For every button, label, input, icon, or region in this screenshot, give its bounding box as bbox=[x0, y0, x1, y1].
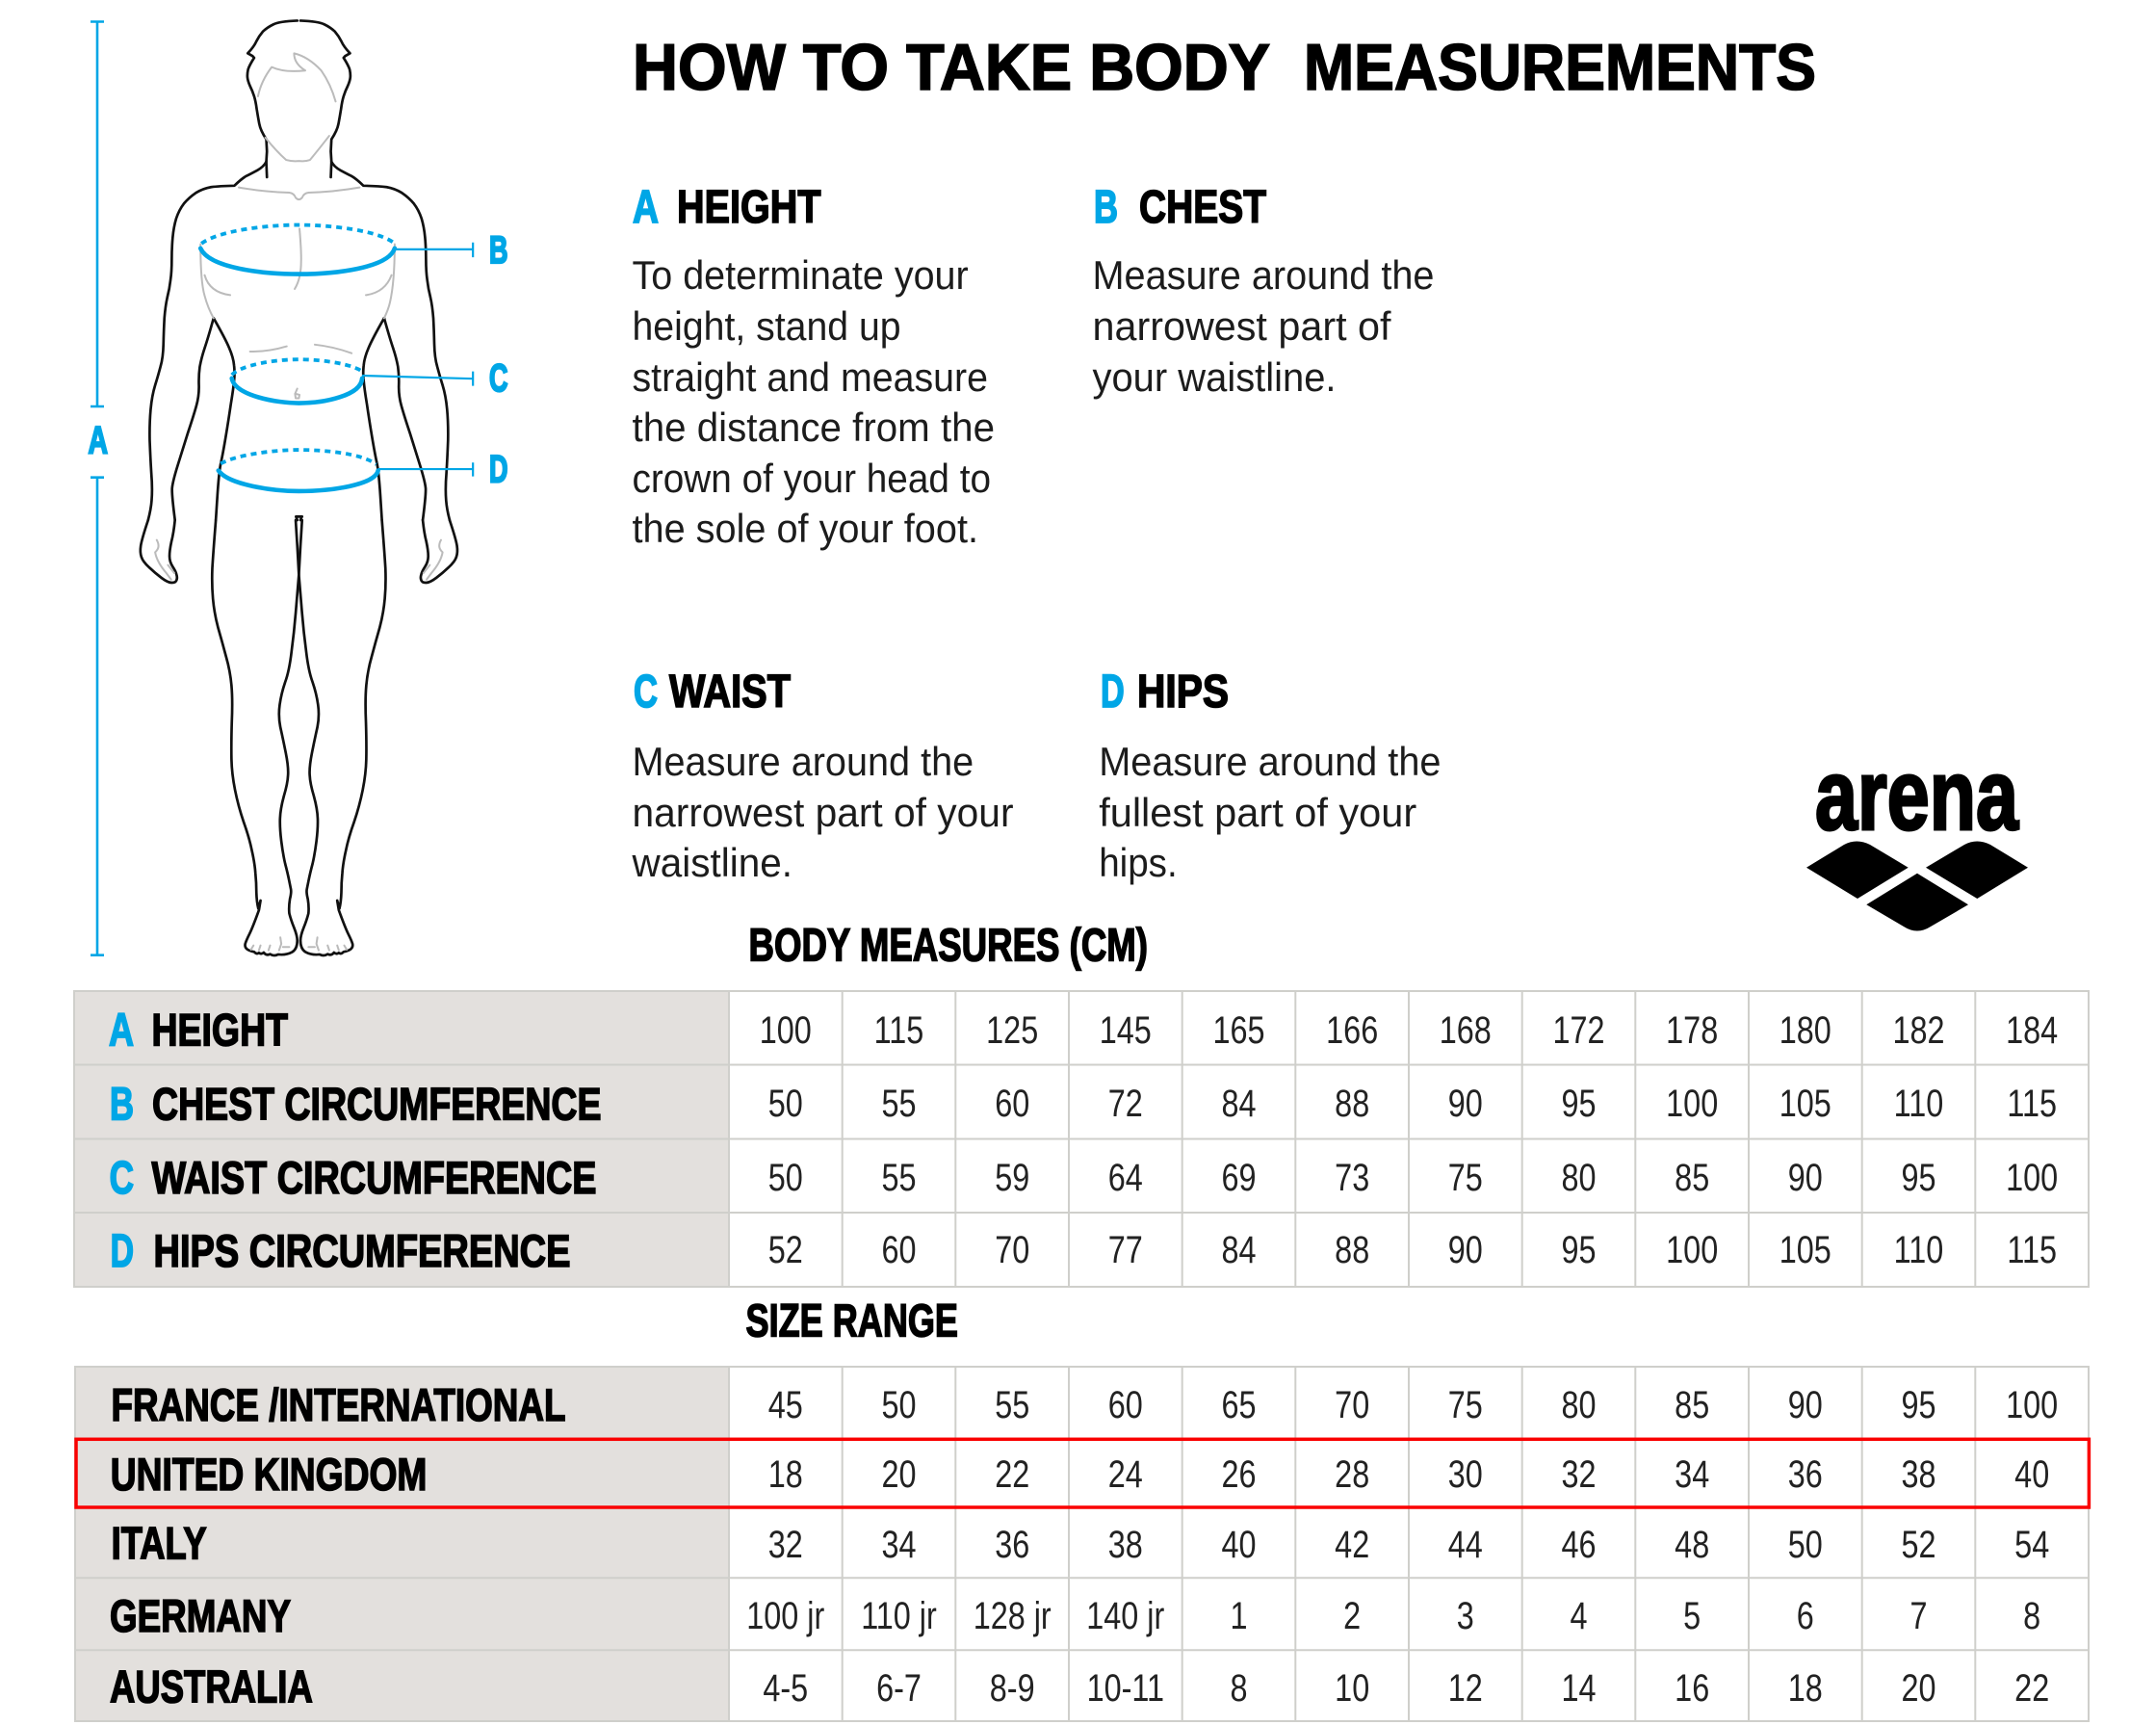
row: chest circumference: 55 bbox=[881, 1082, 917, 1125]
row: france / international: 70 bbox=[1335, 1383, 1369, 1426]
section D: hips bbox=[1099, 666, 1441, 885]
row: height: 168 bbox=[1440, 1008, 1492, 1052]
row: chest circumference: CHEST CIRCUMFERENCE bbox=[152, 1079, 601, 1129]
text A: To determinate your bbox=[632, 252, 969, 298]
heading B bbox=[1094, 182, 1266, 233]
row: height: A bbox=[109, 1006, 134, 1056]
row: united kingdom: 26 bbox=[1221, 1452, 1257, 1496]
row: italy: 46 bbox=[1561, 1523, 1597, 1566]
figure label B: B bbox=[489, 229, 508, 272]
row: waist circumference: WAIST CIRCUMFERENCE bbox=[152, 1152, 597, 1203]
heading A bbox=[633, 182, 820, 233]
text B: narrowest part of bbox=[1092, 303, 1391, 349]
row: united kingdom: 32 bbox=[1561, 1452, 1597, 1496]
row: waist circumference: 100 bbox=[2006, 1156, 2058, 1199]
row: chest circumference: 88 bbox=[1335, 1082, 1369, 1125]
row: hips circumference: 70 bbox=[995, 1228, 1029, 1271]
row: italy: 40 bbox=[1221, 1523, 1257, 1566]
row: hips circumference: 77 bbox=[1108, 1228, 1143, 1271]
row: waist circumference: C bbox=[110, 1153, 134, 1204]
heading D: HIPS bbox=[1137, 666, 1229, 718]
row: height: 100 bbox=[760, 1008, 812, 1052]
row: france / international: 90 bbox=[1788, 1383, 1823, 1426]
text D: Measure around the bbox=[1099, 739, 1441, 784]
row: australia: 22 bbox=[2014, 1666, 2049, 1710]
row: chest circumference: B bbox=[110, 1079, 134, 1131]
row: united kingdom: 40 bbox=[2014, 1452, 2049, 1496]
text C: Measure around the bbox=[632, 739, 974, 784]
row: france / international: 80 bbox=[1561, 1383, 1597, 1426]
text B: your waistline. bbox=[1092, 354, 1337, 400]
row: hips circumference: 90 bbox=[1448, 1228, 1483, 1271]
row: hips circumference: 100 bbox=[1666, 1228, 1718, 1271]
row: australia: 10 bbox=[1335, 1666, 1369, 1710]
arena logo: arena bbox=[1815, 740, 2019, 851]
row: waist circumference: 64 bbox=[1108, 1156, 1143, 1199]
row: waist circumference: 95 bbox=[1901, 1156, 1936, 1199]
heading A: A bbox=[633, 182, 659, 233]
row: germany: 110 jr bbox=[861, 1594, 937, 1637]
row: hips circumference: 115 bbox=[2007, 1228, 2057, 1271]
title: HOW TO TAKE BODY bbox=[633, 31, 1270, 104]
row: australia: 12 bbox=[1448, 1666, 1483, 1710]
row: italy: 54 bbox=[2014, 1523, 2049, 1566]
row: france / international: 50 bbox=[881, 1383, 917, 1426]
ring D: hips bbox=[219, 450, 473, 491]
right hand and leg bbox=[299, 520, 457, 955]
row: united kingdom: 18 bbox=[768, 1452, 803, 1496]
row: france / international: 60 bbox=[1108, 1383, 1143, 1426]
row: chest circumference: 72 bbox=[1108, 1082, 1143, 1125]
row: germany bbox=[110, 1590, 2040, 1641]
section B: chest bbox=[1092, 182, 1435, 400]
row: united kingdom: 34 bbox=[1675, 1452, 1709, 1496]
row: chest circumference: 100 bbox=[1666, 1082, 1718, 1125]
row: hips circumference: HIPS CIRCUMFERENCE bbox=[154, 1225, 570, 1276]
row: germany: 1 bbox=[1230, 1594, 1248, 1637]
row: waist circumference: 59 bbox=[995, 1156, 1029, 1199]
row: chest circumference: 95 bbox=[1561, 1082, 1597, 1125]
row: height: 184 bbox=[2006, 1008, 2058, 1052]
row: germany: 2 bbox=[1343, 1594, 1361, 1637]
row: france / international: 55 bbox=[995, 1383, 1029, 1426]
row: germany: 6 bbox=[1797, 1594, 1814, 1637]
row: height: 182 bbox=[1892, 1008, 1945, 1052]
row: hips circumference: 110 bbox=[1894, 1228, 1943, 1271]
text D: fullest part of your bbox=[1099, 790, 1416, 835]
text A: crown of your head to bbox=[632, 456, 991, 501]
row: australia: 14 bbox=[1561, 1666, 1597, 1710]
ring B: chest bbox=[200, 225, 473, 274]
row: germany: 100 jr bbox=[746, 1594, 824, 1637]
row: united kingdom: 24 bbox=[1108, 1452, 1143, 1496]
title bbox=[633, 31, 1816, 104]
row: australia: 6-7 bbox=[876, 1666, 922, 1710]
row: germany: 5 bbox=[1683, 1594, 1701, 1637]
text B: Measure around the bbox=[1092, 252, 1435, 298]
row: height: 180 bbox=[1779, 1008, 1831, 1052]
row: height: 165 bbox=[1212, 1008, 1265, 1052]
row: chest circumference: 115 bbox=[2007, 1082, 2057, 1125]
row: australia: 8-9 bbox=[990, 1666, 1035, 1710]
heading B: B bbox=[1094, 182, 1118, 233]
text A: straight and measure bbox=[632, 354, 988, 400]
row: hips circumference: D bbox=[111, 1226, 134, 1277]
row: germany: 8 bbox=[2023, 1594, 2040, 1637]
row: germany: 140 jr bbox=[1086, 1594, 1164, 1637]
head and right side outline bbox=[300, 20, 450, 520]
row: hips circumference: 84 bbox=[1221, 1228, 1257, 1271]
row: italy: 34 bbox=[881, 1523, 917, 1566]
arena logo bbox=[1806, 740, 2028, 930]
heading: size range: SIZE RANGE bbox=[745, 1296, 958, 1347]
label column background bbox=[75, 1367, 729, 1721]
text C bbox=[632, 739, 1014, 885]
row: australia: 8 bbox=[1230, 1666, 1248, 1710]
height bar A bbox=[89, 21, 108, 955]
row: australia: 20 bbox=[1901, 1666, 1936, 1710]
text A: the sole of your foot. bbox=[632, 506, 978, 551]
heading: body measures: BODY MEASURES (CM) bbox=[749, 921, 1148, 971]
ring C: waist bbox=[232, 359, 473, 404]
row: france / international: FRANCE /INTERNATIONAL bbox=[112, 1379, 566, 1430]
row: height bbox=[109, 1004, 2058, 1056]
row: height: HEIGHT bbox=[152, 1004, 288, 1056]
row: france / international: 45 bbox=[768, 1383, 803, 1426]
row: united kingdom bbox=[111, 1449, 2049, 1500]
row: italy: 48 bbox=[1675, 1523, 1709, 1566]
row: france / international: 75 bbox=[1448, 1383, 1483, 1426]
row: hips circumference: 105 bbox=[1779, 1228, 1831, 1271]
heading A: HEIGHT bbox=[677, 182, 820, 233]
row: waist circumference: 69 bbox=[1221, 1156, 1257, 1199]
row: france / international: 85 bbox=[1675, 1383, 1709, 1426]
row: italy: 32 bbox=[768, 1523, 803, 1566]
text A: height, stand up bbox=[632, 303, 901, 349]
row: height: 166 bbox=[1326, 1008, 1378, 1052]
text B bbox=[1092, 252, 1435, 400]
row: france / international: 65 bbox=[1221, 1383, 1257, 1426]
row: waist circumference: 73 bbox=[1335, 1156, 1369, 1199]
body figure with measurement rings bbox=[141, 20, 473, 955]
row: height: 178 bbox=[1666, 1008, 1718, 1052]
row: australia: AUSTRALIA bbox=[110, 1661, 313, 1712]
row: hips circumference: 95 bbox=[1561, 1228, 1597, 1271]
table grid bbox=[74, 991, 2089, 1287]
row: hips circumference: 88 bbox=[1335, 1228, 1369, 1271]
left hand and leg bbox=[141, 520, 299, 955]
heading D bbox=[1101, 666, 1229, 718]
row: chest circumference: 90 bbox=[1448, 1082, 1483, 1125]
text A: the distance from the bbox=[632, 405, 995, 450]
row: italy bbox=[112, 1518, 2049, 1569]
row: australia: 18 bbox=[1788, 1666, 1823, 1710]
text D: hips. bbox=[1099, 840, 1178, 885]
row: france / international bbox=[112, 1379, 2058, 1430]
row: germany: 3 bbox=[1457, 1594, 1474, 1637]
row: italy: 44 bbox=[1448, 1523, 1483, 1566]
row: waist circumference: 90 bbox=[1788, 1156, 1823, 1199]
title: MEASUREMENTS bbox=[1304, 31, 1816, 104]
row: chest circumference: 50 bbox=[768, 1082, 803, 1125]
row: australia bbox=[110, 1661, 2049, 1712]
row: australia: 16 bbox=[1675, 1666, 1709, 1710]
row: france / international: 95 bbox=[1901, 1383, 1936, 1426]
row: waist circumference bbox=[110, 1152, 2058, 1204]
row: height: 145 bbox=[1100, 1008, 1152, 1052]
row: height: 172 bbox=[1552, 1008, 1605, 1052]
row: united kingdom: 30 bbox=[1448, 1452, 1483, 1496]
row: italy: 36 bbox=[995, 1523, 1029, 1566]
row: germany: 4 bbox=[1570, 1594, 1588, 1637]
figure lower half bbox=[141, 520, 457, 955]
heading D: D bbox=[1101, 666, 1125, 718]
row: germany: 128 jr bbox=[974, 1594, 1052, 1637]
row: waist circumference: 55 bbox=[881, 1156, 917, 1199]
table: size range bbox=[75, 1367, 2089, 1721]
text D bbox=[1099, 739, 1441, 885]
row: germany: 7 bbox=[1909, 1594, 1928, 1637]
row: italy: ITALY bbox=[112, 1518, 207, 1569]
label column background bbox=[74, 991, 729, 1287]
row: italy: 52 bbox=[1901, 1523, 1936, 1566]
text C: waistline. bbox=[632, 840, 792, 885]
row: united kingdom: 22 bbox=[995, 1452, 1029, 1496]
height bar A: A bbox=[89, 420, 108, 462]
row: hips circumference: 52 bbox=[768, 1228, 803, 1271]
row: italy: 50 bbox=[1788, 1523, 1823, 1566]
row: united kingdom: 28 bbox=[1335, 1452, 1369, 1496]
row: germany: GERMANY bbox=[110, 1590, 291, 1641]
row: italy: 42 bbox=[1335, 1523, 1369, 1566]
row: france / international: 100 bbox=[2006, 1383, 2058, 1426]
table: body measures bbox=[74, 991, 2089, 1287]
text A bbox=[632, 252, 995, 551]
row: chest circumference: 60 bbox=[995, 1082, 1029, 1125]
row: chest circumference: 105 bbox=[1779, 1082, 1831, 1125]
heading C: C bbox=[634, 666, 658, 718]
row: united kingdom: 38 bbox=[1901, 1452, 1936, 1496]
row: waist circumference: 75 bbox=[1448, 1156, 1483, 1199]
row: hips circumference: 60 bbox=[881, 1228, 917, 1271]
row: waist circumference: 85 bbox=[1675, 1156, 1709, 1199]
row: waist circumference: 80 bbox=[1561, 1156, 1597, 1199]
face, chest and abdomen detail lines bbox=[200, 53, 395, 399]
section A: height bbox=[632, 182, 995, 551]
row: australia: 10-11 bbox=[1087, 1666, 1164, 1710]
row: chest circumference: 110 bbox=[1894, 1082, 1943, 1125]
row: height: 125 bbox=[986, 1008, 1038, 1052]
table grid bbox=[75, 1367, 2089, 1721]
row: chest circumference bbox=[110, 1079, 2057, 1131]
section C: waist bbox=[632, 666, 1014, 885]
heading B: CHEST bbox=[1139, 182, 1266, 233]
row: chest circumference: 84 bbox=[1221, 1082, 1257, 1125]
figure upper half bbox=[148, 20, 473, 520]
row: united kingdom: UNITED KINGDOM bbox=[111, 1449, 427, 1500]
row: height: 115 bbox=[874, 1008, 923, 1052]
red highlight around united kingdom row bbox=[76, 1439, 2089, 1507]
row: italy: 38 bbox=[1108, 1523, 1143, 1566]
text C: narrowest part of your bbox=[632, 790, 1014, 835]
head and left side outline bbox=[148, 20, 302, 520]
heading C: WAIST bbox=[669, 666, 791, 718]
heading C bbox=[634, 666, 791, 718]
row: australia: 4-5 bbox=[763, 1666, 808, 1710]
figure label C: C bbox=[489, 357, 508, 400]
row: hips circumference bbox=[111, 1225, 2057, 1277]
row: united kingdom: 20 bbox=[881, 1452, 917, 1496]
row: waist circumference: 50 bbox=[768, 1156, 803, 1199]
row: united kingdom: 36 bbox=[1788, 1452, 1823, 1496]
figure label D: D bbox=[489, 449, 508, 491]
